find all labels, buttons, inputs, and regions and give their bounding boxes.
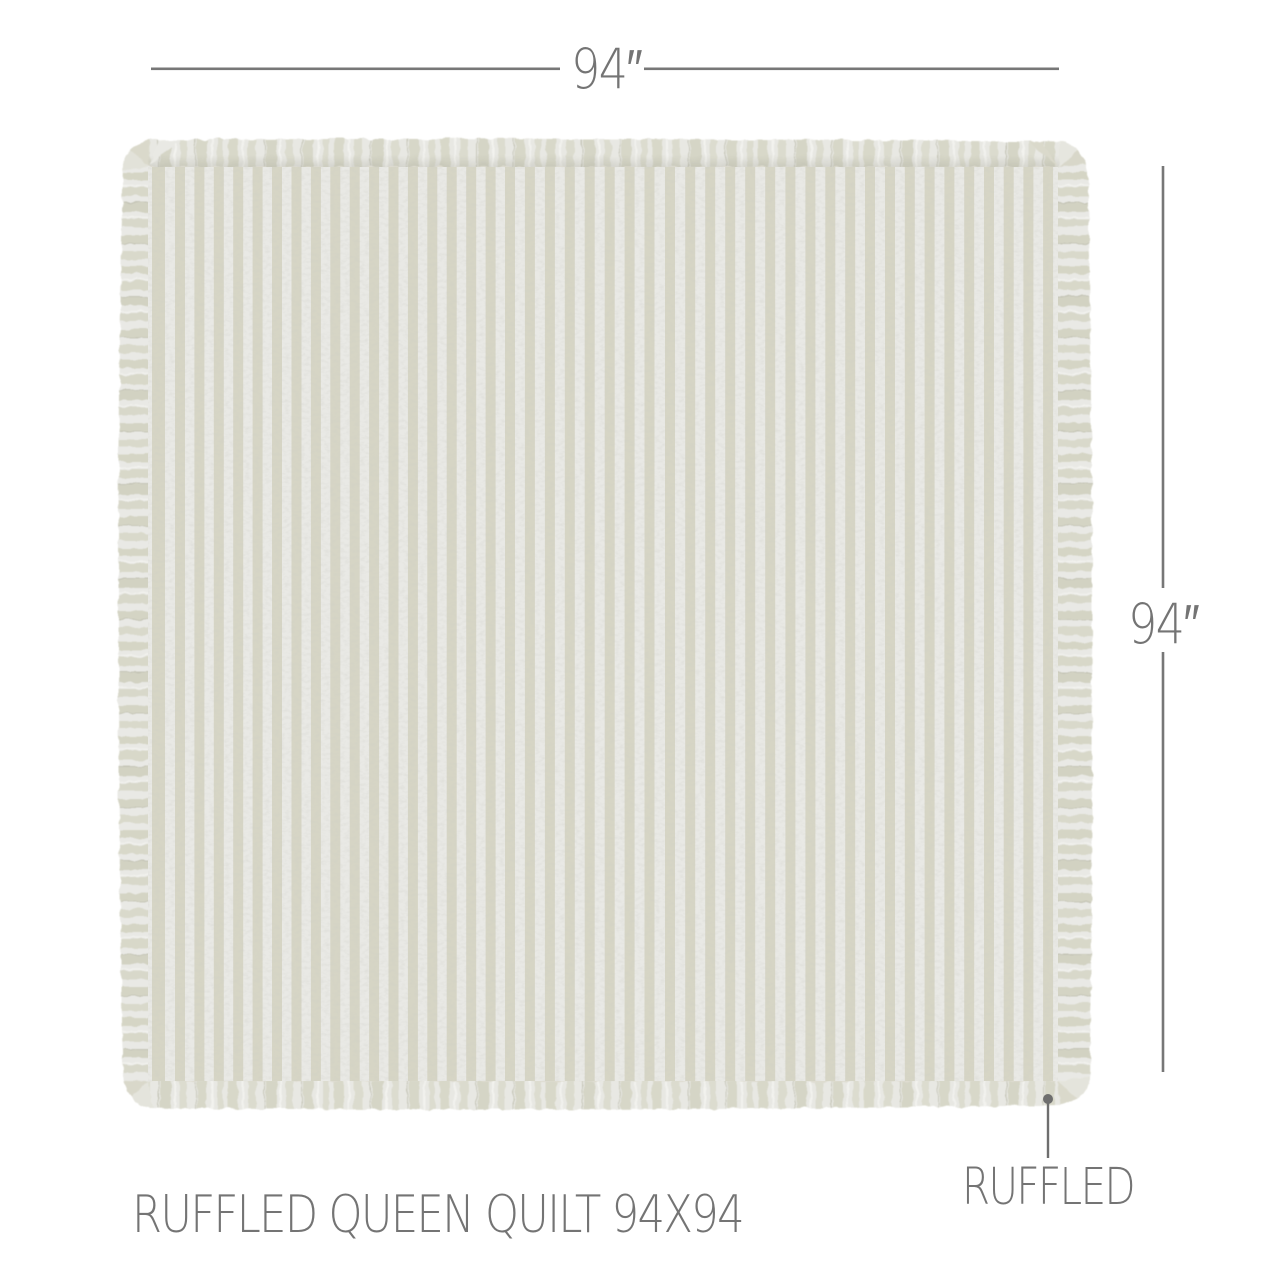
- top width label: 94″: [571, 37, 642, 101]
- right height dimension line, lower: [1162, 652, 1164, 1072]
- right height label: 94″: [1128, 592, 1199, 656]
- ruffled callout: [962, 1094, 1134, 1217]
- top width dimension line, right: [644, 68, 1059, 70]
- callout leader line: [1047, 1099, 1049, 1158]
- callout label: RUFFLED: [962, 1158, 1134, 1217]
- callout dot: [1043, 1094, 1053, 1104]
- quilt: [110, 130, 1110, 1120]
- quilt ruffle border: [110, 130, 1110, 1120]
- top width dimension line, left: [151, 68, 560, 70]
- product title: RUFFLED QUEEN QUILT 94X94: [132, 1185, 743, 1245]
- right height dimension line, upper: [1162, 166, 1164, 588]
- quilt striped centre panel: [148, 167, 1058, 1081]
